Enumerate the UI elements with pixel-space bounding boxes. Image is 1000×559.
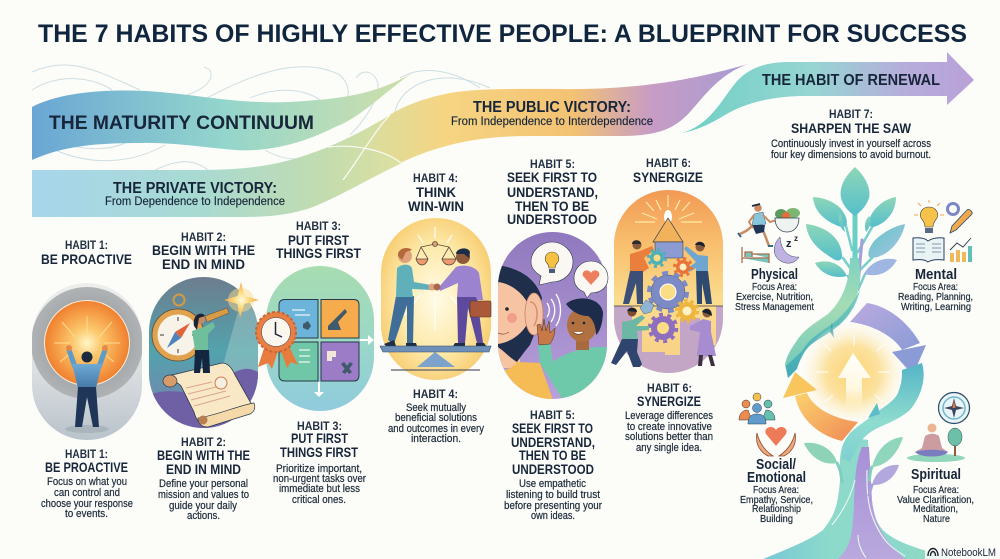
spiritual text: Meditation, <box>913 504 958 515</box>
ribbon: public victory <box>363 64 748 163</box>
scroll <box>163 363 255 427</box>
ribbon label: THE MATURITY CONTINUUM <box>49 113 314 134</box>
spiritual text <box>897 467 974 525</box>
light bulb <box>914 200 944 233</box>
habit 3 description <box>273 419 366 506</box>
habit 1 description: Focus on what you <box>47 476 127 488</box>
teal stem arc <box>785 258 860 378</box>
habit 3 heading: HABIT 3: <box>296 219 341 233</box>
private victory subheading: From Dependence to Independence <box>105 196 285 208</box>
habit 4 heading <box>408 171 464 214</box>
habit 1 description: BE PROACTIVE <box>45 460 128 475</box>
habit 6 description: to create innovative <box>627 421 712 433</box>
habit 7 description: HABIT 7: <box>829 107 873 121</box>
habit 4 description: HABIT 4: <box>413 387 458 401</box>
bottom right person <box>690 308 716 366</box>
icons: spiritual <box>907 392 970 462</box>
habit 7 description: four key dimensions to avoid burnout. <box>771 149 931 161</box>
physical text: Physical <box>751 267 798 283</box>
habit 1 heading <box>41 238 132 267</box>
physical text: Exercise, Nutrition, <box>736 292 813 303</box>
priority matrix <box>279 300 359 381</box>
compass <box>938 392 970 424</box>
habit 5 description: THEN TO BE <box>519 448 586 463</box>
meditating figure <box>915 424 948 456</box>
habit 2 description: mission and values to <box>158 489 249 501</box>
roots and trunk <box>763 437 957 559</box>
habit 2 description: END IN MIND <box>166 462 241 477</box>
habit 6 heading: HABIT 6: <box>646 156 691 170</box>
social emotional text: Empathy, Service, <box>740 495 813 506</box>
bottom left person <box>611 300 654 367</box>
arrow: the habit of renewal <box>682 52 974 133</box>
habit 6 description: SYNERGIZE <box>637 394 701 409</box>
illustration: habit 3 priority matrix with clock <box>256 266 374 411</box>
woman <box>498 265 553 400</box>
habit 2 description: Define your personal <box>159 478 248 490</box>
icons: physical: z <box>794 234 798 243</box>
illustration: habit 1 person before sun <box>31 283 143 440</box>
mental text <box>898 267 973 313</box>
habit 1 description: HABIT 1: <box>65 447 108 461</box>
habit 4 description: Seek mutually <box>406 402 467 414</box>
habit 5 description <box>504 408 602 522</box>
heart <box>765 427 787 446</box>
spiritual text: Nature <box>923 514 950 525</box>
briefcase <box>470 301 491 317</box>
open book <box>913 238 944 262</box>
shared structure <box>614 218 723 306</box>
title: THE 7 HABITS OF HIGHLY EFFECTIVE PEOPLE: A BLUEPRINT FOR SUCCESS <box>38 20 967 48</box>
habit 4 heading: THINK <box>416 185 456 200</box>
speech bubble: heart <box>574 261 608 298</box>
mental text: Focus Area: <box>913 282 958 293</box>
spiritual text: Focus Area: <box>913 485 959 496</box>
habit 3 description: THINGS FIRST <box>280 445 359 460</box>
private victory heading: THE PRIVATE VICTORY: <box>113 180 277 197</box>
public victory subheading: From Independence to Interdependence <box>451 116 653 128</box>
habit 5 heading: HABIT 5: <box>530 157 575 171</box>
icons: mental <box>913 200 972 262</box>
purple arc arrow <box>850 303 926 375</box>
habit 5 description: listening to build trust <box>506 489 600 501</box>
mental text: Reading, Planning, <box>898 292 973 303</box>
habit 5 heading: SEEK FIRST TO <box>507 170 597 185</box>
habit 7 description <box>771 107 931 161</box>
orange arc arrow <box>783 372 858 441</box>
habit 4 description: interaction. <box>411 433 461 445</box>
teal arc arrow <box>842 363 924 462</box>
habit 2 description: actions. <box>187 510 220 522</box>
habit 2 heading: HABIT 2: <box>181 230 226 244</box>
habit 1 heading: BE PROACTIVE <box>41 252 132 267</box>
habit 2 heading: BEGIN WITH THE <box>152 243 255 258</box>
habit 3 description: critical ones. <box>292 494 346 506</box>
arrows <box>314 335 374 397</box>
habit 1 description <box>41 447 133 520</box>
runner <box>738 204 777 246</box>
habit 6 description: any single idea. <box>636 442 702 454</box>
physical text: Stress Management <box>735 302 814 313</box>
habit 2 description: guide your daily <box>169 500 238 512</box>
habit 3 description: PUT FIRST <box>291 431 349 446</box>
habit 6 description: HABIT 6: <box>647 381 692 395</box>
habit 5 description: Use empathetic <box>519 478 587 490</box>
habit 1 description: to events. <box>65 508 108 520</box>
top right person <box>684 242 712 304</box>
habit 5 description: HABIT 5: <box>530 408 575 422</box>
compass <box>152 294 204 361</box>
leaves <box>804 167 905 485</box>
habit 3 heading: PUT FIRST <box>288 233 350 248</box>
habit 5 heading: UNDERSTAND, <box>507 185 598 200</box>
person with telescope <box>192 308 229 373</box>
habit 6 description <box>625 381 713 454</box>
habit 2 heading: END IN MIND <box>162 257 245 272</box>
habit 1 description: can control and <box>54 487 120 499</box>
illustration: habit 2 compass, telescope and scroll <box>149 277 259 430</box>
small tree <box>948 428 962 456</box>
habit 2 description: BEGIN WITH THE <box>157 448 250 463</box>
habit 3 description: Prioritize important, <box>276 463 362 475</box>
upward arrow <box>838 353 871 412</box>
glowing centre <box>803 323 903 423</box>
habit 3 description: immediate but less <box>279 483 360 495</box>
group of people <box>739 393 775 424</box>
habit 4 description: and outcomes in every <box>388 423 485 435</box>
illustration: habit 7 tree of renewal <box>763 167 957 559</box>
bed <box>742 247 769 263</box>
clock badge <box>256 312 298 369</box>
habit 2 description: HABIT 2: <box>181 435 226 449</box>
habit 6 description: Leverage differences <box>625 410 713 422</box>
balance scale icon <box>416 242 456 265</box>
habit 5 heading <box>507 157 598 227</box>
top left person <box>623 240 654 304</box>
habit 5 description: before presenting your <box>504 500 602 512</box>
physical text: Focus Area: <box>752 282 797 293</box>
illustration: habit 6 synergy gears <box>611 190 723 373</box>
social emotional text: Social/ <box>756 457 796 473</box>
man <box>538 298 610 400</box>
gear <box>948 204 958 214</box>
hands <box>757 433 795 456</box>
social emotional text: Emotional <box>747 470 806 486</box>
ground <box>907 454 965 462</box>
gears <box>648 250 698 342</box>
habit 5 heading: UNDERSTOOD <box>507 212 597 227</box>
social emotional text: Relationship <box>752 504 801 515</box>
spiritual text: Value Clarification, <box>897 495 974 506</box>
habit 5 description: own ideas. <box>531 510 575 522</box>
habit 3 heading <box>276 219 362 261</box>
habit 4 heading: HABIT 4: <box>413 171 458 185</box>
icons: physical <box>738 204 800 263</box>
physical text <box>735 267 814 313</box>
habit 3 heading: THINGS FIRST <box>276 246 362 261</box>
habit 5 heading: THEN TO BE <box>515 199 589 214</box>
habit 5 description: SEEK FIRST TO <box>512 421 593 436</box>
star <box>224 282 259 318</box>
ribbon: the maturity continuum <box>32 73 412 160</box>
habit 7 description: SHARPEN THE SAW <box>791 121 911 136</box>
balance platform <box>380 346 491 370</box>
mental text: Writing, Learning <box>901 302 971 313</box>
mental text: Mental <box>915 267 957 283</box>
speech bubble: idea <box>531 242 573 285</box>
habit 2 description <box>157 435 250 522</box>
left man <box>384 248 431 346</box>
habit 6 heading: SYNERGIZE <box>633 170 703 185</box>
social emotional text: Building <box>760 514 793 525</box>
right man <box>428 248 486 346</box>
social emotional text <box>740 457 813 525</box>
illustration: habit 5 empathetic listening <box>498 232 610 400</box>
moon <box>774 237 799 263</box>
habit 1 heading: HABIT 1: <box>65 238 108 252</box>
icons: physical: z <box>786 238 792 250</box>
ribbon: private victory <box>32 115 402 217</box>
pen <box>950 209 972 233</box>
social emotional text: Focus Area: <box>753 485 799 496</box>
habit 6 heading <box>633 156 703 185</box>
renewal label: THE HABIT OF RENEWAL <box>762 72 940 89</box>
habit 7 description: Continuously invest in yourself across <box>771 138 931 150</box>
habit 5 description: UNDERSTOOD <box>512 462 594 477</box>
branches <box>837 215 875 495</box>
habit 4 description: beneficial solutions <box>395 412 477 424</box>
spiritual text: Spiritual <box>911 467 961 483</box>
growth chart <box>950 238 972 262</box>
hand <box>537 319 555 345</box>
habit 6 description: solutions better than <box>625 431 713 443</box>
habit 5 description: UNDERSTAND, <box>511 435 595 450</box>
illustration: habit 4 handshake on scale <box>380 218 491 380</box>
habit 3 description: non-urgent tasks over <box>273 473 366 485</box>
public victory heading: THE PUBLIC VICTORY: <box>473 99 631 116</box>
habit 1 description: choose your response <box>41 498 133 510</box>
habit 3 description: HABIT 3: <box>297 419 342 433</box>
icons: social emotional <box>739 393 795 456</box>
habit 4 heading: WIN-WIN <box>408 199 464 214</box>
habit 4 description <box>388 387 485 445</box>
habit 2 heading <box>152 230 255 272</box>
salad bowl <box>775 208 800 232</box>
